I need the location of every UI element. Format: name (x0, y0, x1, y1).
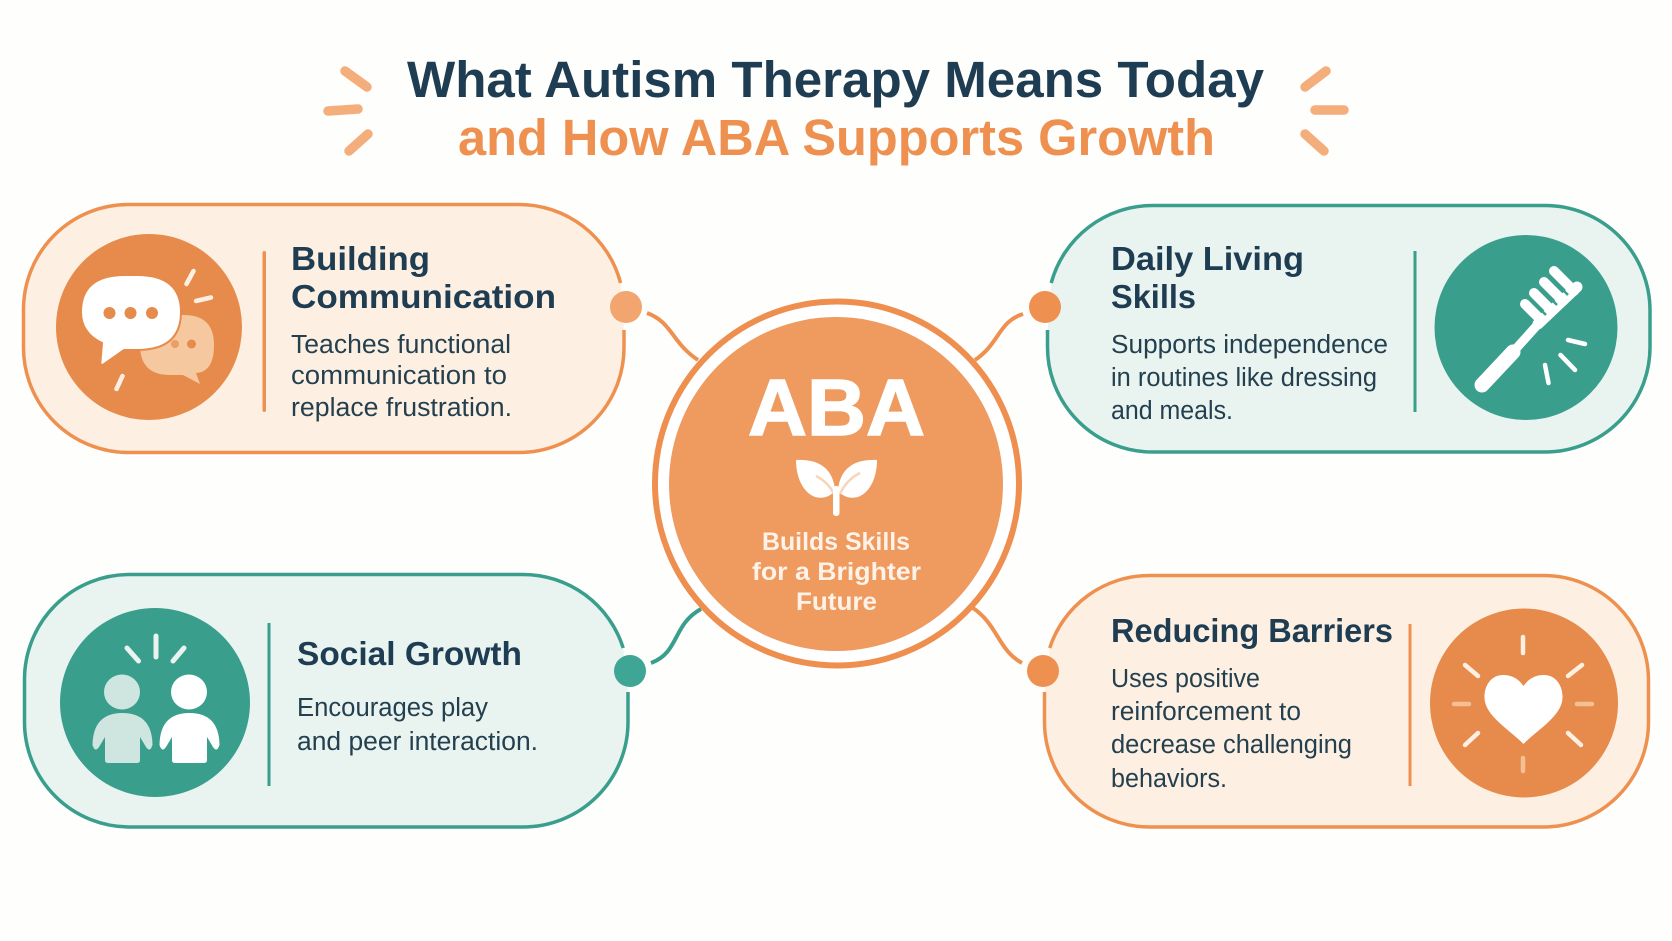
node: bottom left (614, 655, 646, 687)
panel outline (24, 204, 624, 452)
divider (262, 251, 266, 412)
icon: right title sparks (1305, 71, 1344, 151)
panel outline (1048, 206, 1650, 452)
heading: Building (291, 240, 430, 277)
body text: decrease challenging (1111, 731, 1352, 759)
divider (1414, 251, 1416, 412)
body text (1111, 665, 1352, 793)
body text: Supports independence (1111, 331, 1388, 359)
body text: communication to (291, 362, 507, 390)
body text (297, 694, 538, 756)
node: top left (610, 291, 642, 323)
heading (1111, 240, 1304, 315)
badge caption: for a Brighter (752, 558, 921, 586)
heading: Daily Living (1111, 240, 1304, 277)
node: top right (1029, 291, 1061, 323)
connector: bottom right (973, 608, 1022, 663)
badge caption: Future (796, 588, 877, 616)
body text: and meals. (1111, 397, 1233, 425)
badge caption (752, 528, 921, 616)
body text: and peer interaction. (297, 728, 538, 756)
title line 2: and How ABA Supports Growth (458, 109, 1215, 166)
badge caption: Builds Skills (762, 528, 910, 556)
body text: reinforcement to (1111, 698, 1301, 726)
heading: Communication (291, 278, 556, 315)
center badge: ABA (655, 302, 1019, 666)
connector: bottom left (651, 609, 701, 663)
title (407, 51, 1265, 166)
body text: Encourages play (297, 694, 488, 722)
panel: reducing barriers (1044, 576, 1648, 827)
divider (1408, 624, 1412, 786)
body text: replace frustration. (291, 394, 512, 422)
panel: building communication (24, 204, 624, 452)
heading: Reducing Barriers (1111, 612, 1393, 649)
icon: speech bubbles (56, 234, 242, 420)
body text: in routines like dressing (1111, 364, 1377, 392)
icon: left title sparks (328, 71, 368, 151)
badge heading: ABA (748, 363, 925, 452)
outer ring (655, 302, 1019, 666)
body text: Teaches functional (291, 331, 511, 359)
title line 1: What Autism Therapy Means Today (407, 51, 1265, 108)
icon: heart with rays (1430, 608, 1618, 798)
panel outline (24, 574, 628, 827)
heading (291, 240, 556, 315)
connector: top left (647, 313, 698, 360)
heading: Skills (1111, 278, 1196, 315)
body text: behaviors. (1111, 765, 1227, 793)
body text (1111, 331, 1388, 425)
connector: top right (975, 314, 1023, 360)
icon: toothbrush (1434, 235, 1618, 420)
icon: sprout (796, 460, 877, 516)
heading: Social Growth (297, 635, 522, 672)
panel: social growth (24, 574, 628, 827)
panel: daily living skills (1048, 206, 1650, 452)
node: bottom right (1027, 655, 1059, 687)
panel outline (1044, 576, 1648, 827)
body text: Uses positive (1111, 665, 1260, 693)
inner disc (669, 317, 1003, 651)
body text (291, 331, 512, 422)
icon: two people (60, 608, 250, 797)
divider (268, 623, 270, 786)
